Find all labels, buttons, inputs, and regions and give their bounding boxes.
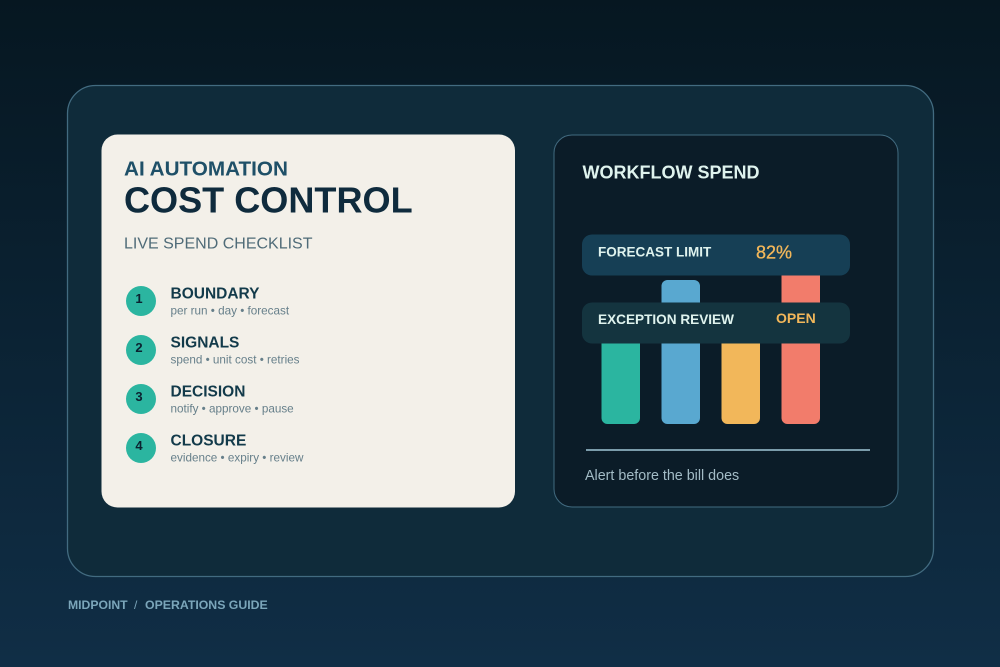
callout: exception review: [582, 302, 850, 344]
callout: forecast limit: [582, 234, 850, 276]
checklist item 1: 1: [135, 291, 143, 306]
checklist item 4: CLOSURE: [170, 432, 246, 450]
panel: workflow spend: [554, 135, 898, 507]
checklist item 3: [126, 384, 294, 416]
checklist item 4: evidence • expiry • review: [170, 452, 304, 464]
heading: AI automation: AI AUTOMATION: [124, 158, 288, 180]
checklist item 2: [126, 334, 300, 366]
checklist item 4: 4: [135, 438, 143, 453]
panel: checklist card: [102, 134, 515, 508]
checklist item 3: 3: [135, 389, 143, 404]
checklist item 3: notify • approve • pause: [170, 402, 294, 416]
title: cost control: COST CONTROL: [124, 180, 413, 220]
panel: outer frame: [68, 86, 934, 576]
checklist item 1: [126, 286, 290, 318]
footer: MIDPOINT: [68, 598, 128, 612]
callout: exception review: OPEN: [776, 310, 816, 326]
checklist item 2: spend • unit cost • retries: [170, 354, 300, 366]
checklist item 3: DECISION: [170, 384, 245, 400]
footer: /: [134, 598, 138, 612]
callout: forecast limit: FORECAST LIMIT: [598, 244, 712, 260]
bar chart: [602, 260, 820, 424]
footer: [68, 598, 268, 612]
subtitle: LIVE SPEND CHECKLIST: [124, 236, 313, 252]
checklist item 1: per run • day • forecast: [170, 304, 290, 318]
footer: OPERATIONS GUIDE: [145, 598, 268, 612]
checklist item 1: BOUNDARY: [170, 286, 260, 302]
checklist item 2: SIGNALS: [170, 334, 239, 352]
callout: forecast limit: 82%: [756, 242, 792, 262]
heading: workflow spend: WORKFLOW SPEND: [582, 162, 760, 182]
checklist item 4: [126, 432, 304, 464]
caption: Alert before the bill does: [585, 468, 739, 484]
callout: exception review: EXCEPTION REVIEW: [598, 312, 734, 327]
checklist item 2: 2: [135, 340, 143, 355]
